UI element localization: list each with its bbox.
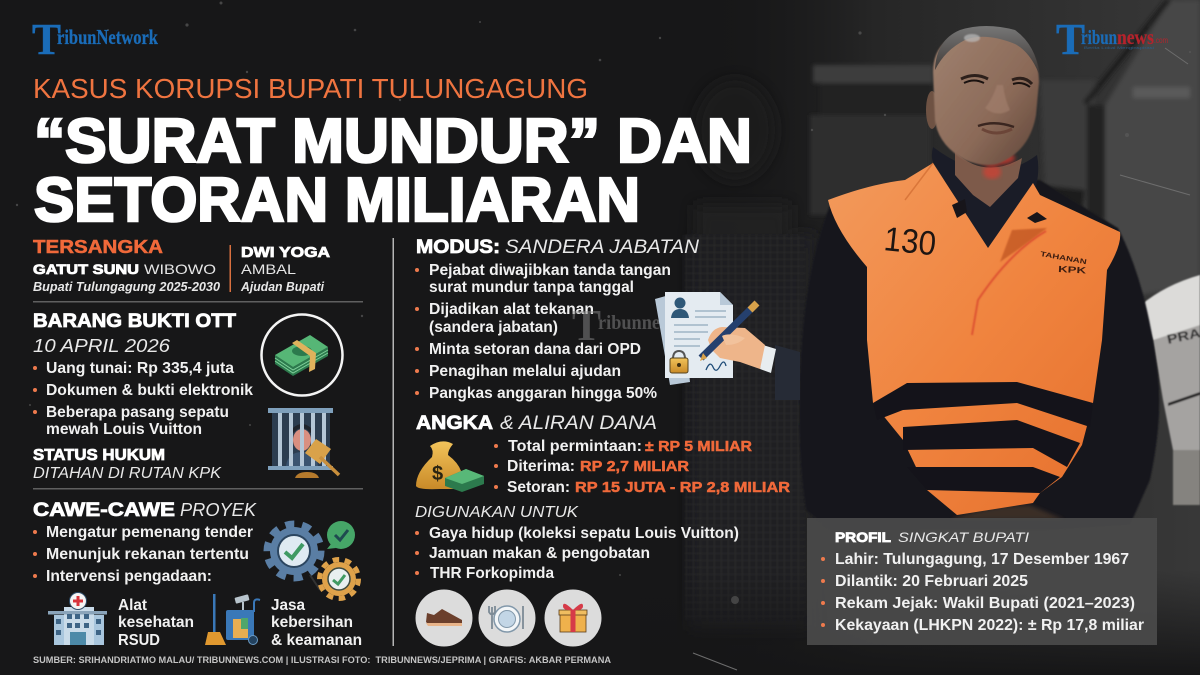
top-right logo: Tribunnews: ribun [1081, 27, 1117, 49]
vest number: 130 [882, 220, 938, 263]
evidence list: Beberapa pasang sepatu [46, 404, 229, 421]
suspect: Dwi Yoga Ambal: AMBAL [241, 261, 296, 277]
procurement item: hospital equipment: kesehatan [118, 614, 194, 631]
panel: profil singkat bupati: SINGKAT BUPATI [898, 529, 1029, 545]
procurement item: hospital equipment: Alat [118, 597, 148, 614]
head [926, 26, 1039, 165]
legal status: DITAHAN DI RUTAN KPK [33, 465, 222, 482]
modus list: Pejabat diwajibkan tanda tangan [429, 262, 671, 279]
panel: modus sandera jabatan: SANDERA JABATAN [505, 237, 699, 258]
watermark: ribunne [598, 312, 660, 334]
fund flow figures: Diterima: [507, 458, 575, 475]
uses list: Gaya hidup (koleksi sepatu Louis Vuitton) [429, 525, 739, 542]
police officer background figure: PRA [1166, 325, 1200, 347]
modus list: Penagihan melalui ajudan [429, 363, 621, 380]
suspect: Gatut Sunu Wibowo: WIBOWO [144, 261, 216, 277]
suspect: Dwi Yoga Ambal: Ajudan Bupati [240, 280, 325, 294]
title: “SURAT MUNDUR” DAN [34, 107, 752, 176]
suspect: Gatut Sunu Wibowo [33, 261, 220, 294]
hands [950, 505, 1065, 520]
police officer background figure [1141, 275, 1200, 505]
fund flow figures: RP 15 JUTA - RP 2,8 MILIAR [575, 479, 790, 496]
subtitle: KASUS KORUPSI BUPATI TULUNGAGUNG [33, 73, 588, 104]
uses list: Jamuan makan & pengobatan [429, 545, 650, 562]
heading: BARANG BUKTI OTT [33, 311, 236, 332]
photo: suspect in orange KPK vest [799, 26, 1159, 530]
top-left logo: TribunNetwork [32, 15, 158, 64]
panel: cawe-cawe proyek [33, 500, 362, 649]
title: SETORAN MILIARAN [34, 166, 640, 235]
orange vest [828, 163, 1120, 515]
panel: modus sandera jabatan [415, 237, 800, 402]
profile list: Dilantik: 20 Februari 2025 [835, 573, 1028, 590]
modus list: Dijadikan alat tekanan [429, 301, 594, 318]
profile list: Lahir: Tulungagung, 17 Desember 1967 [835, 551, 1129, 568]
modus list: (sandera jabatan) [429, 319, 558, 336]
panel: tersangka [33, 237, 330, 294]
fund flow figures: Total permintaan: [508, 438, 642, 455]
suspect: Dwi Yoga Ambal: DWI YOGA [241, 244, 330, 261]
icon: hospital [48, 592, 107, 645]
icon: gift box [544, 590, 602, 646]
icon: cash stack [262, 314, 342, 396]
vest black stripes [873, 382, 1093, 493]
heading: MODUS: [416, 237, 500, 258]
procurement item: cleaning and security: Jasa [271, 597, 305, 614]
procurement item: hospital equipment [48, 592, 194, 649]
icon: broom and cart [205, 594, 260, 645]
heading: status hukum: STATUS HUKUM [33, 447, 165, 464]
turtleneck [932, 147, 1038, 250]
procurement item: cleaning and security: & keamanan [271, 632, 362, 649]
panel: cawe-cawe proyek: PROYEK [180, 500, 257, 520]
body and arms [799, 180, 1159, 530]
icon: money bag [416, 441, 484, 492]
panel: angka dan aliran dana: & ALIRAN DANA [500, 413, 657, 434]
icon: money bag: $ [432, 463, 443, 485]
fund flow figures [494, 438, 790, 496]
evidence list: Dokumen & bukti elektronik [46, 382, 253, 399]
procurement item: cleaning and security [205, 594, 362, 649]
heading: DIGUNAKAN UNTUK [415, 504, 579, 521]
vest folds [972, 231, 1046, 335]
project interference list: Intervensi pengadaan: [46, 568, 212, 585]
panel: digunakan untuk [415, 504, 739, 646]
heading: CAWE-CAWE [33, 500, 175, 521]
profile list: Rekam Jejak: Wakil Bupati (2021–2023) [835, 595, 1135, 612]
evidence list: mewah Louis Vuitton [46, 421, 202, 438]
source credit: SUMBER: SRIHANDRIATMO MALAU/ TRIBUNNEWS.COM | ILUSTRASI FOTO: TRIBUNNEWS/JEPRIMA | GRAFIS: AKBAR PERMANA [33, 655, 611, 665]
title [34, 107, 752, 235]
suspect: Gatut Sunu Wibowo: GATUT SUNU [33, 261, 139, 277]
procurement item: cleaning and security: kebersihan [271, 614, 353, 631]
vest label [1040, 251, 1087, 276]
panel: angka dan aliran dana [416, 413, 790, 496]
modus list: Minta setoran dana dari OPD [429, 341, 641, 358]
icon: plate and cutlery [478, 590, 536, 646]
top-right logo: Tribunnews: T [1056, 15, 1085, 64]
date: 10 APRIL 2026 [33, 336, 171, 356]
top-right logo: Tribunnews [1056, 15, 1168, 64]
fund flow figures: Setoran: [507, 479, 570, 496]
fund flow figures: RP 2,7 MILIAR [580, 458, 689, 475]
top-right logo: Tribunnews: Berita Lokal Menginspirasi [1084, 45, 1154, 50]
icon: gears and checks [267, 521, 358, 598]
top-left logo: TribunNetwork: T [32, 15, 61, 64]
evidence list [33, 360, 253, 438]
icon: signed document and hand with pen [655, 292, 800, 400]
heading: ANGKA [416, 413, 493, 434]
project interference list [33, 524, 253, 585]
top-right logo: Tribunnews: news [1117, 27, 1154, 49]
fund flow figures: ± RP 5 MILIAR [645, 438, 752, 455]
modus list: surat mundur tanpa tanggal [429, 279, 634, 296]
panel: profil singkat bupati [807, 518, 1157, 645]
icon: shoes [416, 590, 472, 646]
suspect: Gatut Sunu Wibowo: Bupati Tulungagung 2025-2030 [33, 280, 220, 294]
vest label: TAHANAN [1040, 251, 1087, 266]
top-left logo: TribunNetwork: ribunNetwork [57, 25, 158, 49]
icon: jail and gavel [268, 408, 339, 478]
heading: PROFIL [835, 529, 891, 545]
project interference list: Menunjuk rekanan tertentu [46, 546, 249, 563]
panel: barang bukti OTT [33, 311, 342, 482]
profile list: Kekayaan (LHKPN 2022): ± Rp 17,8 miliar [835, 617, 1144, 634]
project interference list: Mengatur pemenang tender [46, 524, 253, 541]
top-right logo: Tribunnews: .com [1154, 36, 1168, 45]
uses list: THR Forkopimda [430, 565, 554, 582]
profile list [821, 551, 1144, 634]
uses list [415, 525, 739, 582]
modus list: Pangkas anggaran hingga 50% [429, 385, 657, 402]
watermark [572, 301, 660, 350]
watermark: T [572, 301, 601, 350]
vest label: KPK [1058, 264, 1087, 276]
evidence list: Uang tunai: Rp 335,4 juta [46, 360, 234, 377]
procurement item: hospital equipment: RSUD [118, 632, 160, 649]
modus list [415, 262, 671, 402]
suspect: Dwi Yoga Ambal [240, 244, 330, 294]
heading: TERSANGKA [33, 237, 163, 257]
neck [955, 152, 1022, 207]
